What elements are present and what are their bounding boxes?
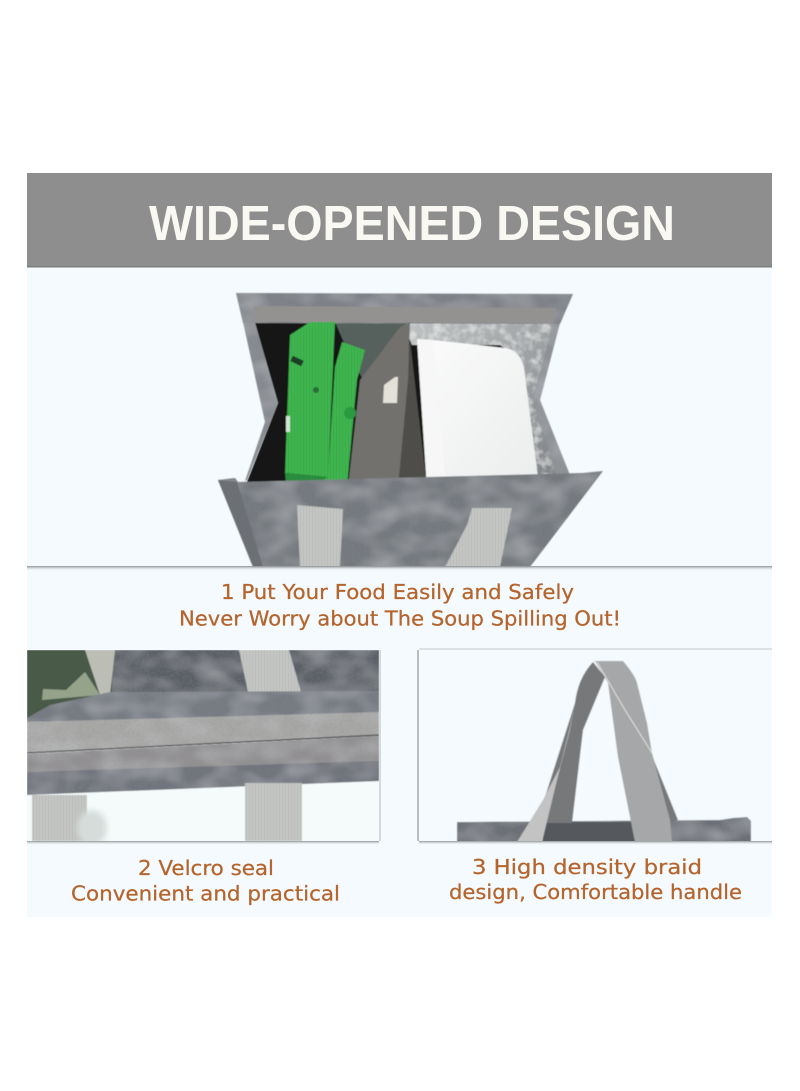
caption 1: Never Worry about The Soup Spilling Out! (179, 606, 621, 630)
dark reflective foil behind packets (335, 322, 408, 378)
background panel (27, 267, 772, 917)
caption 2: Convenient and practical (71, 882, 340, 906)
caption 3 (449, 855, 742, 904)
white food container (417, 339, 538, 488)
front panel of bag (218, 471, 603, 567)
lower seam band (27, 761, 379, 795)
rear left strap (545, 662, 605, 823)
dark upper fabric (111, 650, 379, 693)
front-right handle (595, 661, 672, 842)
green interior corner (27, 650, 112, 720)
infographic canvas (27, 173, 772, 917)
photo: velcro seal close-up (27, 650, 379, 846)
dark gray pouch (398, 340, 427, 488)
caption 3: design, Comfortable handle (449, 880, 742, 904)
rear handles (85, 650, 115, 695)
photo: open bag with food (218, 293, 603, 567)
left side flap (243, 322, 278, 481)
upper seam band (27, 691, 379, 722)
title: WIDE-OPENED DESIGN (149, 197, 675, 251)
caption 2 (71, 856, 340, 906)
velcro upper strip (27, 712, 379, 753)
rear-right strap sliver (654, 760, 678, 822)
front handles (32, 795, 87, 841)
silver foil lining (402, 322, 557, 480)
caption 1: 1 Put Your Food Easily and Safely (221, 580, 574, 604)
back collar with velcro strip (236, 293, 573, 324)
caption 2: 2 Velcro seal (138, 856, 274, 880)
header band (27, 173, 772, 268)
caption 3: 3 High density braid (472, 855, 702, 879)
interior dark foil (247, 323, 557, 482)
left handle (297, 505, 343, 567)
photo 3 shadows (419, 841, 772, 845)
caption 1 (179, 580, 621, 630)
photo: braided handle (456, 660, 752, 841)
photo 2 shadow (27, 841, 379, 845)
front-left handle sash (517, 703, 575, 842)
right side flap (533, 323, 570, 478)
right handle (445, 508, 512, 567)
photo 1 bottom shadow (27, 566, 772, 571)
green packet rear strip (317, 342, 365, 486)
green packet front (285, 322, 335, 477)
velcro lower strip (27, 736, 379, 772)
bag top edge (457, 817, 751, 842)
